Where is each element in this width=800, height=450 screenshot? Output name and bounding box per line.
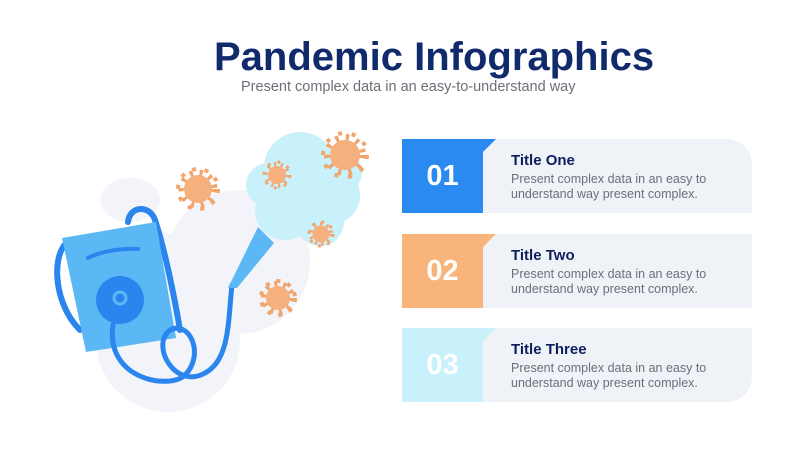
viruses	[178, 133, 367, 315]
illustration: respirator bag with viruses	[54, 131, 369, 412]
card 01: understand way present complex.	[511, 187, 698, 201]
card 01: Title One	[511, 152, 575, 169]
card 03: Present complex data in an easy to	[511, 361, 706, 375]
card 03	[402, 328, 752, 402]
straps	[57, 209, 180, 330]
bag	[62, 222, 176, 352]
card 01	[402, 139, 752, 213]
tube	[112, 285, 232, 381]
card 02: 02	[426, 255, 459, 287]
title: Pandemic Infographics	[214, 35, 654, 79]
card 02: Present complex data in an easy to	[511, 267, 706, 281]
card 03: understand way present complex.	[511, 376, 698, 390]
card 01: 01	[426, 160, 459, 192]
card 02: understand way present complex.	[511, 282, 698, 296]
card 03: 03	[426, 349, 459, 381]
card 02	[402, 234, 752, 308]
cloud	[246, 132, 362, 246]
subtitle: Present complex data in an easy-to-understand way	[241, 79, 576, 95]
background blobs	[90, 178, 310, 412]
card 03: Title Three	[511, 341, 587, 358]
card 01: Present complex data in an easy to	[511, 172, 706, 186]
card 02: Title Two	[511, 247, 575, 264]
nozzle	[228, 227, 274, 288]
